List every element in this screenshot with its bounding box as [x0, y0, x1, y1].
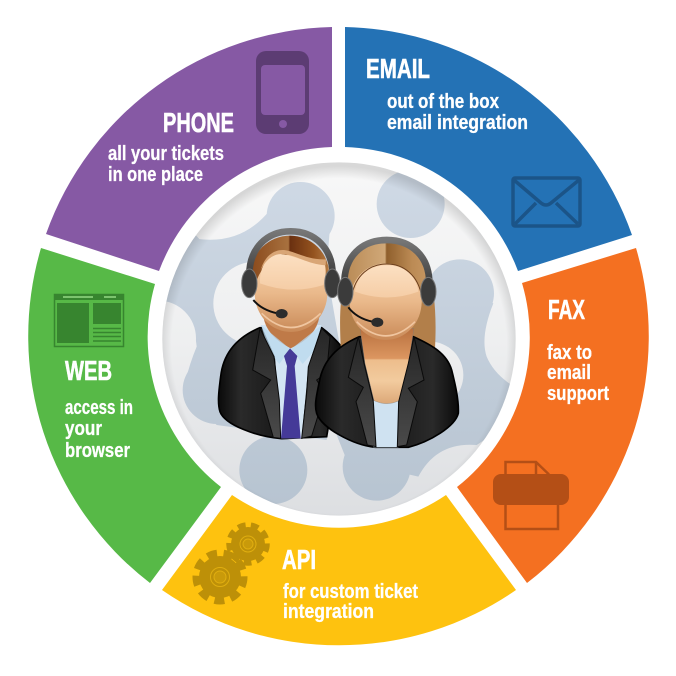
woman neck and chest	[360, 328, 414, 404]
panel: api	[162, 495, 516, 645]
text: api description: integration	[283, 601, 374, 623]
woman hairline	[352, 264, 422, 297]
text: phone description: in one place	[108, 164, 203, 186]
man neck	[263, 317, 319, 348]
man face	[255, 255, 327, 332]
woman chin highlight	[357, 322, 415, 336]
man forehead	[260, 254, 326, 290]
woman headset	[338, 240, 436, 327]
heading: api: API	[282, 544, 316, 575]
central disc with support agents	[162, 162, 516, 516]
woman long hair	[340, 246, 436, 348]
text: fax description: fax to	[547, 342, 592, 364]
man hair swoosh	[261, 250, 326, 270]
text: api description: for custom ticket	[283, 581, 418, 603]
woman forehead	[355, 265, 418, 297]
woman jacket	[316, 337, 458, 447]
icon: browser window	[54, 294, 124, 346]
woman face	[350, 263, 422, 340]
icon: envelope	[513, 178, 580, 226]
text: fax description: support	[547, 383, 609, 405]
icon: gears	[196, 525, 267, 601]
text: phone description: all your tickets	[108, 143, 224, 165]
panel: email	[345, 27, 632, 271]
man hair	[251, 236, 329, 314]
woman lapels	[348, 337, 424, 447]
man jacket	[219, 328, 342, 439]
background disc with pattern	[162, 162, 516, 516]
text: web description: access in	[65, 397, 133, 419]
man headset	[242, 231, 340, 318]
man shirt	[261, 325, 322, 438]
text: web description	[65, 397, 133, 462]
man collar	[261, 325, 322, 364]
agent: woman with headset	[316, 240, 458, 447]
text: web description: browser	[65, 440, 130, 462]
text: email description	[387, 91, 528, 134]
panel: web	[28, 248, 221, 583]
text: api description	[283, 581, 418, 623]
icon: printer	[493, 462, 569, 529]
heading: email: EMAIL	[366, 53, 430, 84]
man tie	[281, 348, 301, 438]
heading: phone: PHONE	[163, 107, 234, 138]
text: fax description: email	[547, 362, 591, 384]
text: fax description	[547, 342, 609, 405]
text: web description: your	[65, 418, 102, 440]
panel: fax	[457, 248, 649, 583]
man chin highlight	[262, 313, 321, 327]
heading: fax: FAX	[548, 294, 585, 325]
woman hair top	[345, 241, 428, 322]
agent: man with headset	[219, 231, 342, 439]
text: phone description	[108, 143, 224, 186]
icon: smartphone	[256, 51, 309, 134]
panel: phone	[46, 27, 332, 271]
text: email description: out of the box	[387, 91, 499, 113]
woman shirt	[373, 401, 398, 447]
heading: web: WEB	[65, 355, 112, 386]
man lapels	[253, 328, 330, 438]
text: email description: email integration	[387, 112, 528, 134]
